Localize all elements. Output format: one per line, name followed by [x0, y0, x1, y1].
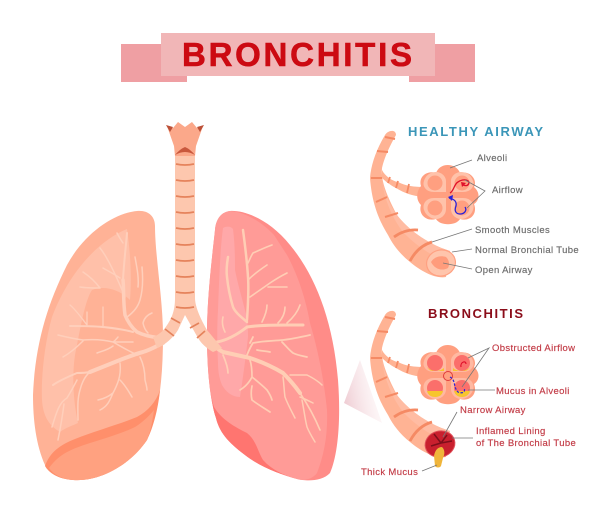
heading: healthy airway: HEALTHY AIRWAY — [408, 124, 543, 139]
right inflamed lung — [205, 211, 339, 480]
airway branches — [205, 230, 322, 442]
airflow arrows — [449, 180, 469, 214]
thick mucus — [434, 447, 444, 468]
lung lower lobe — [45, 390, 160, 480]
title banner — [121, 33, 475, 82]
leader lines — [432, 160, 485, 269]
panel: bronchitis airway — [361, 311, 576, 478]
trachea and bronchi — [153, 122, 222, 352]
callout wedge — [344, 360, 382, 423]
labels: Open Airway — [475, 265, 533, 276]
lung highlight — [42, 229, 131, 432]
labels: of The Bronchial Tube — [476, 438, 576, 449]
bronchial tube — [370, 131, 458, 279]
labels: Narrow Airway — [460, 405, 526, 416]
labels — [361, 343, 576, 478]
mucus — [427, 367, 470, 397]
airway branches — [52, 233, 163, 440]
labels: Inflamed Lining — [476, 426, 546, 437]
lung lower lobe — [211, 392, 297, 479]
leader lines — [422, 348, 495, 471]
title: BRONCHITIS — [182, 36, 412, 73]
labels: Thick Mucus — [361, 467, 418, 478]
bronchial tube — [370, 311, 458, 468]
labels: Alveoli — [477, 153, 507, 164]
panel: healthy airway — [370, 131, 579, 279]
open airway end — [424, 247, 458, 279]
labels — [475, 153, 579, 276]
obstructed airflow arrows — [461, 362, 466, 367]
labels: Obstructed Airflow — [492, 343, 575, 354]
icon: larynx — [166, 122, 204, 156]
lung highlight — [217, 227, 248, 397]
left healthy lung — [33, 211, 163, 480]
heading: bronchitis: BRONCHITIS — [428, 306, 523, 321]
labels: Normal Bronchial Tube — [475, 245, 579, 256]
labels: Airflow — [492, 185, 523, 196]
labels: Mucus in Alveoli — [496, 386, 570, 397]
labels: Smooth Muscles — [475, 225, 550, 236]
inflamed opening — [422, 428, 458, 460]
alveoli cluster — [417, 165, 478, 224]
alveoli cluster — [417, 345, 478, 404]
